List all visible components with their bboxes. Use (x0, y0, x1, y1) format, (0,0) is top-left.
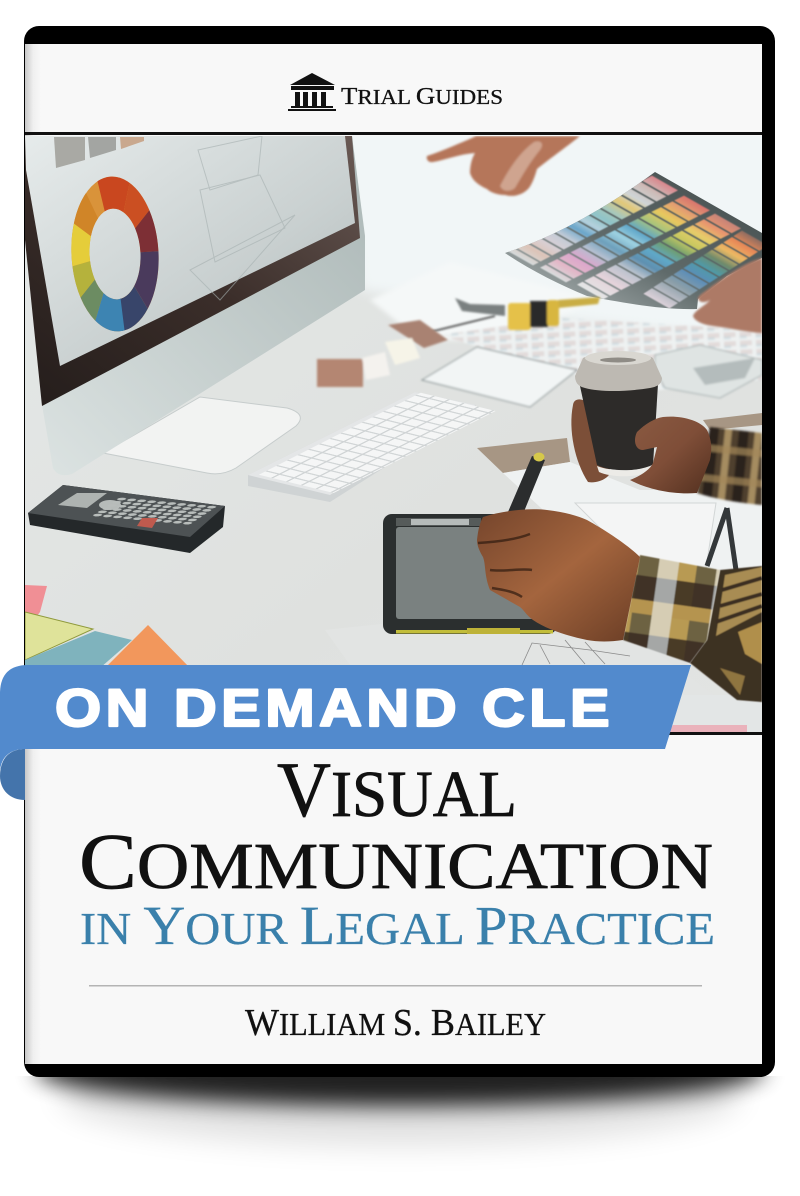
drawing tablet (383, 514, 557, 634)
banner text: ON DEMAND CLE (55, 679, 614, 738)
tape measure (430, 297, 600, 332)
notepad (422, 347, 577, 407)
hand holding swatch sheet (693, 258, 762, 333)
grey swatches on screen (54, 137, 144, 168)
swatch strip 2 (553, 203, 697, 275)
publisher name: TRIAL GUIDES (341, 83, 503, 110)
calculator (28, 485, 225, 553)
case drop shadow (23, 1076, 777, 1154)
chair legs (707, 508, 736, 570)
swatch strip 1 (520, 183, 665, 258)
banner curl (0, 749, 25, 800)
banner: on demand cle (0, 665, 691, 800)
hand with coffee cup (571, 351, 762, 505)
hand around cup (630, 417, 711, 493)
rule above photo (25, 132, 762, 135)
sleeve near cup (697, 427, 762, 505)
divider line (89, 985, 702, 986)
icon: courthouse (288, 73, 336, 111)
sleeve rear (690, 566, 762, 702)
paper under tablet (522, 640, 630, 665)
smartphone (655, 345, 762, 398)
fingers behind cup (571, 399, 610, 482)
desk surface (25, 242, 762, 695)
publisher logo (288, 73, 503, 111)
right desk and pink sheet (670, 725, 747, 732)
monitor (25, 136, 365, 475)
drawing hand (477, 509, 640, 642)
swatch strip 4 (655, 238, 755, 302)
colour wheel (77, 191, 153, 317)
title line 1: VISUAL (277, 746, 517, 833)
title (79, 746, 715, 956)
hand creases (478, 534, 532, 597)
chair frame (575, 503, 716, 568)
tan furniture behind hand (477, 438, 570, 473)
pointing hand (427, 136, 580, 196)
rule below photo (25, 732, 762, 735)
monitor foot (103, 397, 300, 474)
white cover panel (25, 44, 762, 1064)
monitor body (25, 136, 365, 475)
sample chips (317, 320, 448, 387)
colour swatch sheet (505, 172, 762, 309)
sticky notes (25, 585, 190, 668)
swatch strip 3 (590, 221, 728, 292)
bright window background (352, 136, 762, 336)
photo: designers at a desk (25, 120, 780, 735)
author name: WILLIAM S. BAILEY (245, 1002, 546, 1044)
sleeve cuff (623, 555, 720, 663)
title line 2: COMMUNICATION (79, 819, 713, 906)
screen wireframe (190, 136, 295, 300)
monitor screen (25, 136, 355, 366)
monitor bezel (25, 136, 360, 406)
stylus pen (508, 452, 545, 514)
papers on desk (372, 292, 508, 341)
printed colour chart on desk (440, 318, 762, 392)
keyboard (248, 392, 496, 502)
banner band (0, 665, 691, 770)
subtitle: IN YOUR LEGAL PRACTICE (80, 895, 715, 956)
coffee cup (575, 351, 662, 476)
